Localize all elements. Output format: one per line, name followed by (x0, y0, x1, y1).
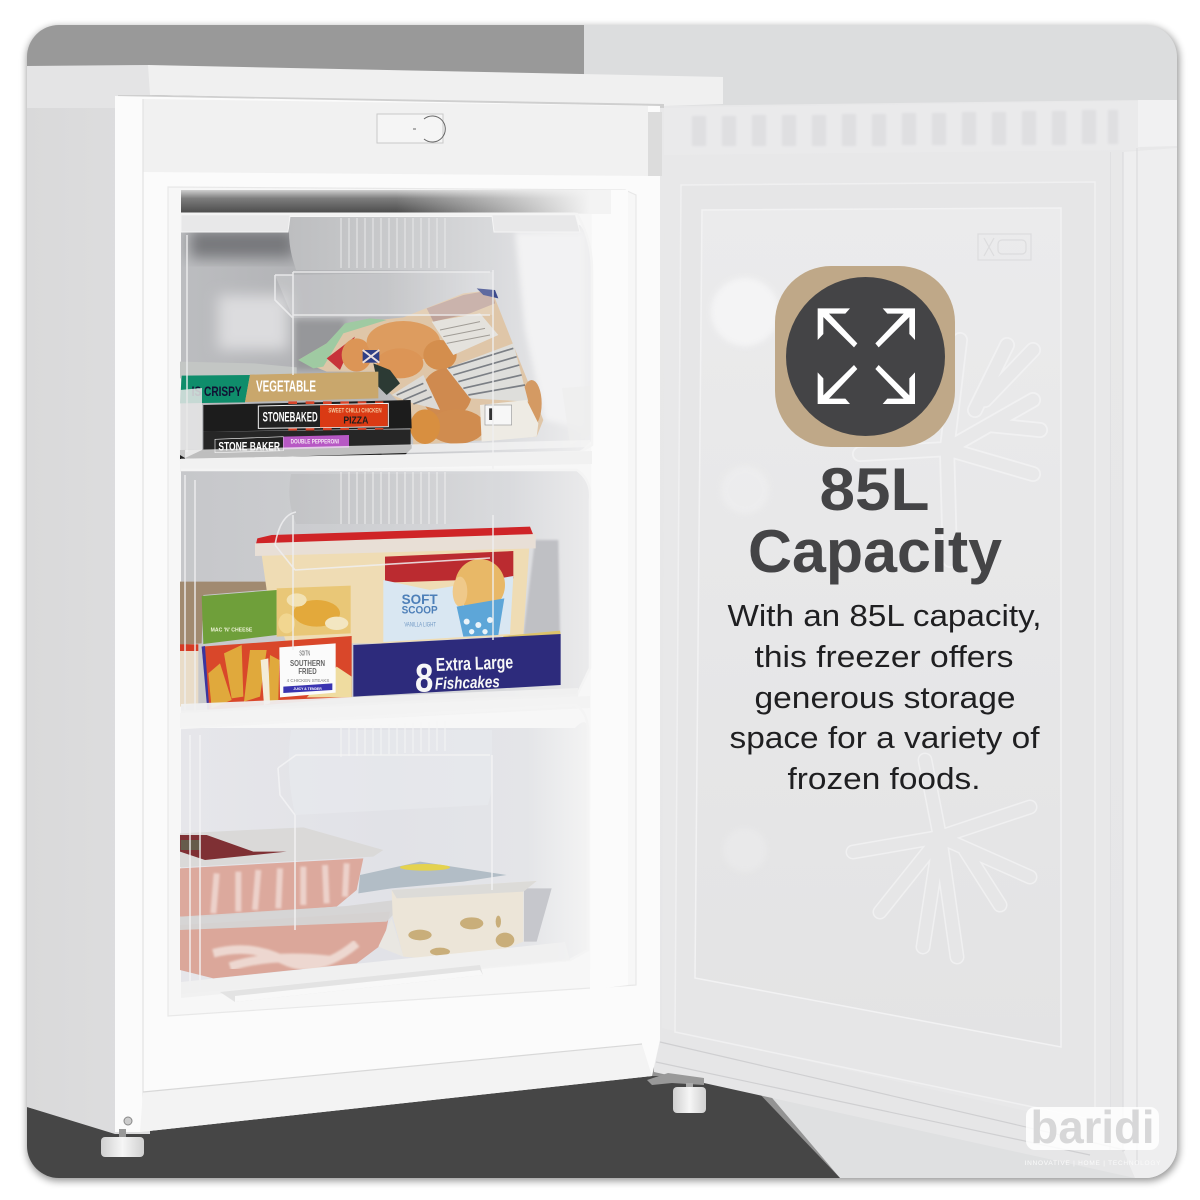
interior side wall (590, 190, 628, 990)
drawer 3 interior (181, 722, 588, 995)
blue corner (307, 667, 352, 697)
right foot (673, 1083, 706, 1113)
embossed bubble (714, 280, 776, 344)
drawer 3 glass floor (181, 942, 570, 998)
uk flag (363, 350, 379, 363)
upper meat (180, 858, 363, 917)
pale box behind (180, 362, 297, 378)
purple label (283, 435, 349, 449)
heading: 85L Capacity: Capacity (748, 518, 1003, 585)
ice cream scoop (453, 559, 505, 611)
embossed snowflake lower (853, 760, 1030, 957)
black box (203, 400, 412, 432)
meat streaks (213, 863, 347, 913)
lower meat frost (213, 943, 357, 967)
background wall left (27, 25, 584, 66)
bag base (298, 290, 543, 445)
drawer 3 outline (181, 705, 588, 995)
fried text: FRIED (298, 666, 317, 676)
tub shadow (523, 540, 560, 635)
drawer 3 clear scoop (190, 735, 492, 990)
pizza red label (320, 404, 388, 427)
vanilla text: VANILLA LIGHT (404, 623, 436, 629)
left foot (101, 1129, 144, 1157)
mac green box (202, 590, 277, 644)
frozen food: ice cream, mac and cheese, chicken, fishcakes (180, 527, 561, 710)
brown box behind (180, 582, 285, 645)
lower rim (180, 898, 408, 930)
frame inner edge line (142, 99, 144, 1096)
hinge gap on frame (648, 112, 662, 176)
bag text label (432, 313, 498, 355)
door lower hem lines (656, 1042, 1125, 1155)
ice cream cup (457, 598, 504, 637)
chicken slices (208, 645, 279, 708)
small embossed rating plate (978, 234, 1031, 260)
dark floor (27, 1076, 840, 1178)
mac text: MAC 'N' CHEESE (211, 628, 253, 634)
logo badge (1026, 1107, 1159, 1150)
drawer 2 front lip (181, 688, 578, 716)
freezer side panel (27, 66, 150, 1134)
drawer 1 outline (181, 214, 592, 460)
number 8: 8 (415, 657, 433, 701)
heading: 85L Capacity (748, 456, 1003, 585)
plinth (142, 1076, 652, 1132)
frozen food: vegetable and pizza boxes and bag (180, 288, 543, 463)
frozen food: meat trays (180, 827, 552, 978)
tan patches (408, 916, 514, 956)
drawer 1 interior (181, 225, 592, 460)
bottom slots (220, 965, 483, 1002)
heading: 85L Capacity: 85L (820, 456, 930, 523)
green label mark (181, 840, 201, 850)
door body (654, 100, 1177, 1178)
tub label blue (383, 576, 513, 642)
second black box (203, 429, 411, 452)
sweet chilli text: SWEET CHILLI CHICKEN (328, 409, 382, 415)
bag dark tag (373, 363, 400, 395)
drawer 1 clear scoop (187, 235, 493, 470)
tub red lid (256, 527, 533, 544)
drawer 2 interior (181, 470, 590, 712)
bag white panel (480, 400, 538, 442)
drawer 1 clear scoop tint (275, 272, 493, 318)
left clip (180, 388, 202, 458)
mac photo (277, 586, 351, 637)
right pack behind (358, 862, 507, 893)
right tray (392, 881, 537, 958)
tray side label (378, 918, 403, 957)
bag stripe lines (397, 348, 525, 404)
badge background (775, 266, 955, 447)
shadow behind tray (524, 888, 552, 942)
scoop word: SCOOP (402, 604, 438, 616)
description text: this freezer offers (754, 640, 1014, 674)
crispy label: IS CRISPY (192, 383, 242, 399)
bag top pattern (427, 290, 495, 322)
soft scoop text: SOFT (402, 591, 438, 607)
chicken white label (279, 643, 336, 697)
red dash row (288, 403, 383, 429)
purple dash row (247, 458, 320, 465)
stonebaked label (258, 403, 388, 428)
lid under shadow (118, 95, 664, 108)
frame screw (124, 1117, 132, 1125)
stonebaked text: STONEBAKED (263, 409, 318, 425)
freezer lid (148, 65, 723, 106)
tub label red (385, 551, 513, 583)
juicy text: JUICY & TENDER (293, 687, 322, 691)
description text: With an 85L capacity, (728, 599, 1042, 633)
drawer top rim (181, 213, 580, 232)
lower meat (180, 912, 390, 978)
warning mark (485, 405, 512, 425)
bag left green (298, 318, 387, 368)
handle ribs (341, 218, 445, 268)
top gap fade (406, 190, 611, 214)
icon: expand arrows (818, 308, 915, 404)
door (654, 100, 1177, 1178)
drawer 2 outline (181, 470, 590, 712)
cup dots (464, 617, 493, 634)
tub lid band (255, 534, 536, 556)
interior opening (168, 187, 636, 1016)
box blue edge (202, 646, 209, 710)
badge circle (786, 277, 945, 436)
drawer 3 ribs (341, 721, 445, 757)
brand logo (1024, 1101, 1161, 1167)
gold behind fishcakes (503, 631, 561, 638)
drawer 2 clear scoop (185, 475, 493, 712)
drawer 1 (180, 213, 592, 470)
description text: frozen foods. (788, 762, 980, 796)
pizza text: PIZZA (343, 415, 368, 426)
interior shading (190, 230, 585, 430)
stone baker text: STONE BAKER (218, 440, 280, 454)
embossed panel outer (674, 1030, 776, 1054)
top dark gap (181, 190, 580, 213)
juicy bar (283, 683, 332, 693)
right foot bracket (647, 1073, 704, 1085)
tray rim (392, 881, 537, 898)
gasket ribs (692, 110, 1118, 146)
icon: capacity badge (775, 266, 955, 447)
vegetable text: VEGETABLE (256, 379, 316, 396)
drawer 3 (180, 705, 588, 998)
right clip (562, 386, 590, 445)
fishcakes box (353, 634, 561, 697)
floor shadow right (772, 1098, 1165, 1178)
door hinge strip (1138, 100, 1177, 147)
side top band (27, 65, 150, 108)
bag flag strip (327, 337, 355, 370)
door right edge (1146, 1148, 1177, 1178)
freezer front frame (115, 96, 660, 1132)
shelf gap 1 (180, 451, 592, 472)
pepperoni text: DOUBLE PEPPERONI (291, 439, 339, 445)
description text (728, 599, 1042, 796)
door top gasket (664, 101, 1140, 155)
drawer 2 handle (289, 474, 493, 524)
drawer 2 ribs (341, 472, 445, 524)
door liner (1110, 152, 1111, 1107)
fishcakes word: Fishcakes (434, 672, 500, 693)
upper lid (180, 827, 383, 867)
tan box (245, 372, 378, 402)
chicken box (202, 636, 352, 710)
dark under box (180, 445, 412, 463)
drawer 3 handle (289, 730, 492, 815)
drawer 1 handle (289, 217, 494, 270)
red label (180, 835, 287, 860)
drawer 1 front lip (185, 440, 590, 460)
logo tagline: INNOVATIVE | HOME | TECHNOLOGY (1024, 1160, 1161, 1167)
description text: space for a variety of (730, 721, 1040, 755)
description text: generous storage (754, 681, 1016, 715)
green box (180, 375, 250, 403)
shelf gap 2 (180, 696, 590, 728)
logo wordmark: baridi (1030, 1101, 1154, 1153)
left box bit (180, 644, 198, 707)
control panel (143, 99, 648, 176)
temperature dial (377, 114, 445, 143)
southern text: SOUTHERN (290, 658, 325, 668)
mac blobs (278, 593, 348, 633)
bag stripes label (447, 343, 528, 402)
stone baker label (215, 437, 283, 453)
extra large: Extra Large (435, 651, 513, 675)
embossed snowflake upper (852, 421, 1048, 568)
frozen food: ice cream, mac and cheese, chicken, fishcakes: SOITN (299, 648, 310, 657)
white cut slice (261, 658, 270, 705)
yellow sticker (400, 864, 450, 871)
steaks text: 4 CHICKEN STEAKS (287, 678, 329, 683)
bag pieces orange (342, 321, 542, 444)
drawer 2 (180, 470, 590, 716)
tub body (262, 547, 529, 643)
background wall right (584, 26, 1177, 106)
embossed panel inner (695, 208, 1061, 1047)
